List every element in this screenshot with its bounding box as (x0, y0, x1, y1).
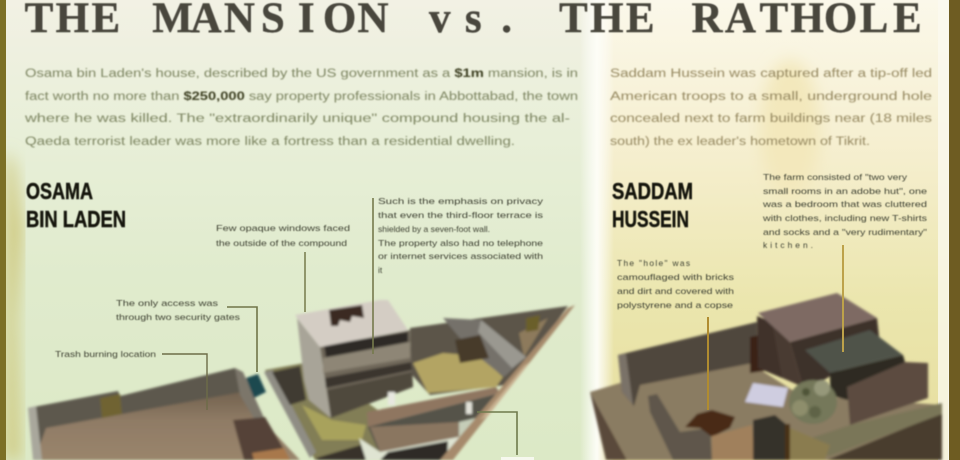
outer court (28, 368, 300, 460)
intro text: Osama bin Laden: fact worth no more than $250,000 say property professionals in Abbottabad, the town (25, 91, 578, 103)
main building (295, 300, 413, 418)
intro text: Saddam Hussein: Saddam Hussein was captured after a tip-off led (610, 68, 932, 80)
rear section and courtyard (410, 306, 568, 395)
right wall (847, 362, 928, 425)
intro text: Osama bin Laden: Osama bin Laden's house, described by the US government as a $1m mansion, is in (25, 68, 578, 80)
callout: privacy: shielded by a seven-foot wall. (378, 224, 490, 234)
callout: access gates (116, 298, 257, 372)
lower roof (805, 330, 903, 373)
callout: the hole: camouflaged with bricks (617, 272, 734, 282)
intro text: Saddam Hussein: south) the ex leader's hometown of Tikrit. (610, 136, 870, 148)
lower wing (359, 387, 500, 460)
callout: privacy: The property also had no telephone (378, 238, 543, 248)
callout: privacy: Such is the emphasis on privacy (378, 196, 544, 206)
long back wall (618, 322, 770, 406)
illustration: Saddam farm hideout (590, 293, 942, 460)
callout: trash burning (55, 349, 207, 410)
callout: the hole (617, 258, 734, 410)
heading: Saddam Hussein (612, 178, 693, 232)
heading: Saddam Hussein: HUSSEIN (612, 206, 689, 232)
callout: privacy (373, 196, 544, 354)
camouflaged hole (685, 410, 735, 437)
callout: windows: the outside of the compound (216, 238, 347, 248)
callout: the hole: polystyrene and a copse (617, 300, 733, 310)
white square (745, 383, 788, 407)
illustration: Bin Laden compound (28, 300, 575, 460)
callout: privacy: it (378, 265, 383, 275)
ground block (590, 363, 942, 460)
callout: trash burning: Trash burning location (55, 349, 156, 359)
leader line: bottom right (477, 412, 534, 460)
callout: the hole: The "hole" was (617, 258, 690, 268)
intro text: Osama bin Laden: Qaeda terrorist leader was more like a fortress than a residential dwelling. (25, 136, 515, 148)
heading: Osama bin Laden (26, 178, 126, 232)
diagonal perimeter wall (440, 305, 575, 460)
callout: farm rooms: was a bedroom that was cluttered (762, 199, 927, 209)
heading: Osama bin Laden: BIN LADEN (26, 206, 126, 232)
inner yard (264, 362, 420, 460)
low front wall (648, 394, 712, 460)
callout: access gates: The only access was (116, 298, 218, 308)
callout: windows: Few opaque windows faced (216, 223, 350, 233)
intro text: Osama bin Laden (24, 68, 578, 148)
heading: Osama bin Laden: OSAMA (26, 178, 93, 204)
building (757, 293, 928, 425)
callout: farm rooms: kitchen. (763, 240, 813, 250)
callout: farm rooms: small rooms in an adobe hut", one (763, 186, 927, 196)
callout: privacy: or internet services associated with (378, 251, 543, 261)
callout: the hole: and dirt and covered with (617, 286, 734, 296)
callout: farm rooms: with clothes, including new T-shirts (762, 213, 927, 223)
roof (295, 300, 408, 347)
intro text: Saddam Hussein: American troops to a small, underground hole (610, 91, 932, 103)
central block (712, 415, 830, 460)
callout: access gates: through two security gates (116, 312, 240, 322)
heading: Saddam Hussein: SADDAM (612, 178, 693, 204)
callout: farm rooms: The farm consisted of "two very (763, 172, 908, 182)
callout: farm rooms (762, 172, 927, 352)
callout: privacy: that even the third-floor terrace is (378, 210, 543, 220)
intro text: Saddam Hussein (610, 68, 932, 148)
callout: farm rooms: and socks and a "very rudimentary" (763, 227, 927, 237)
callout: windows (216, 223, 350, 312)
intro text: Osama bin Laden: where he was killed. The "extraordinarily unique" compound housing the al- (24, 113, 570, 125)
roof (758, 293, 877, 342)
bush (789, 380, 837, 424)
intro text: Saddam Hussein: concealed next to farm buildings near (18 miles (610, 113, 932, 125)
